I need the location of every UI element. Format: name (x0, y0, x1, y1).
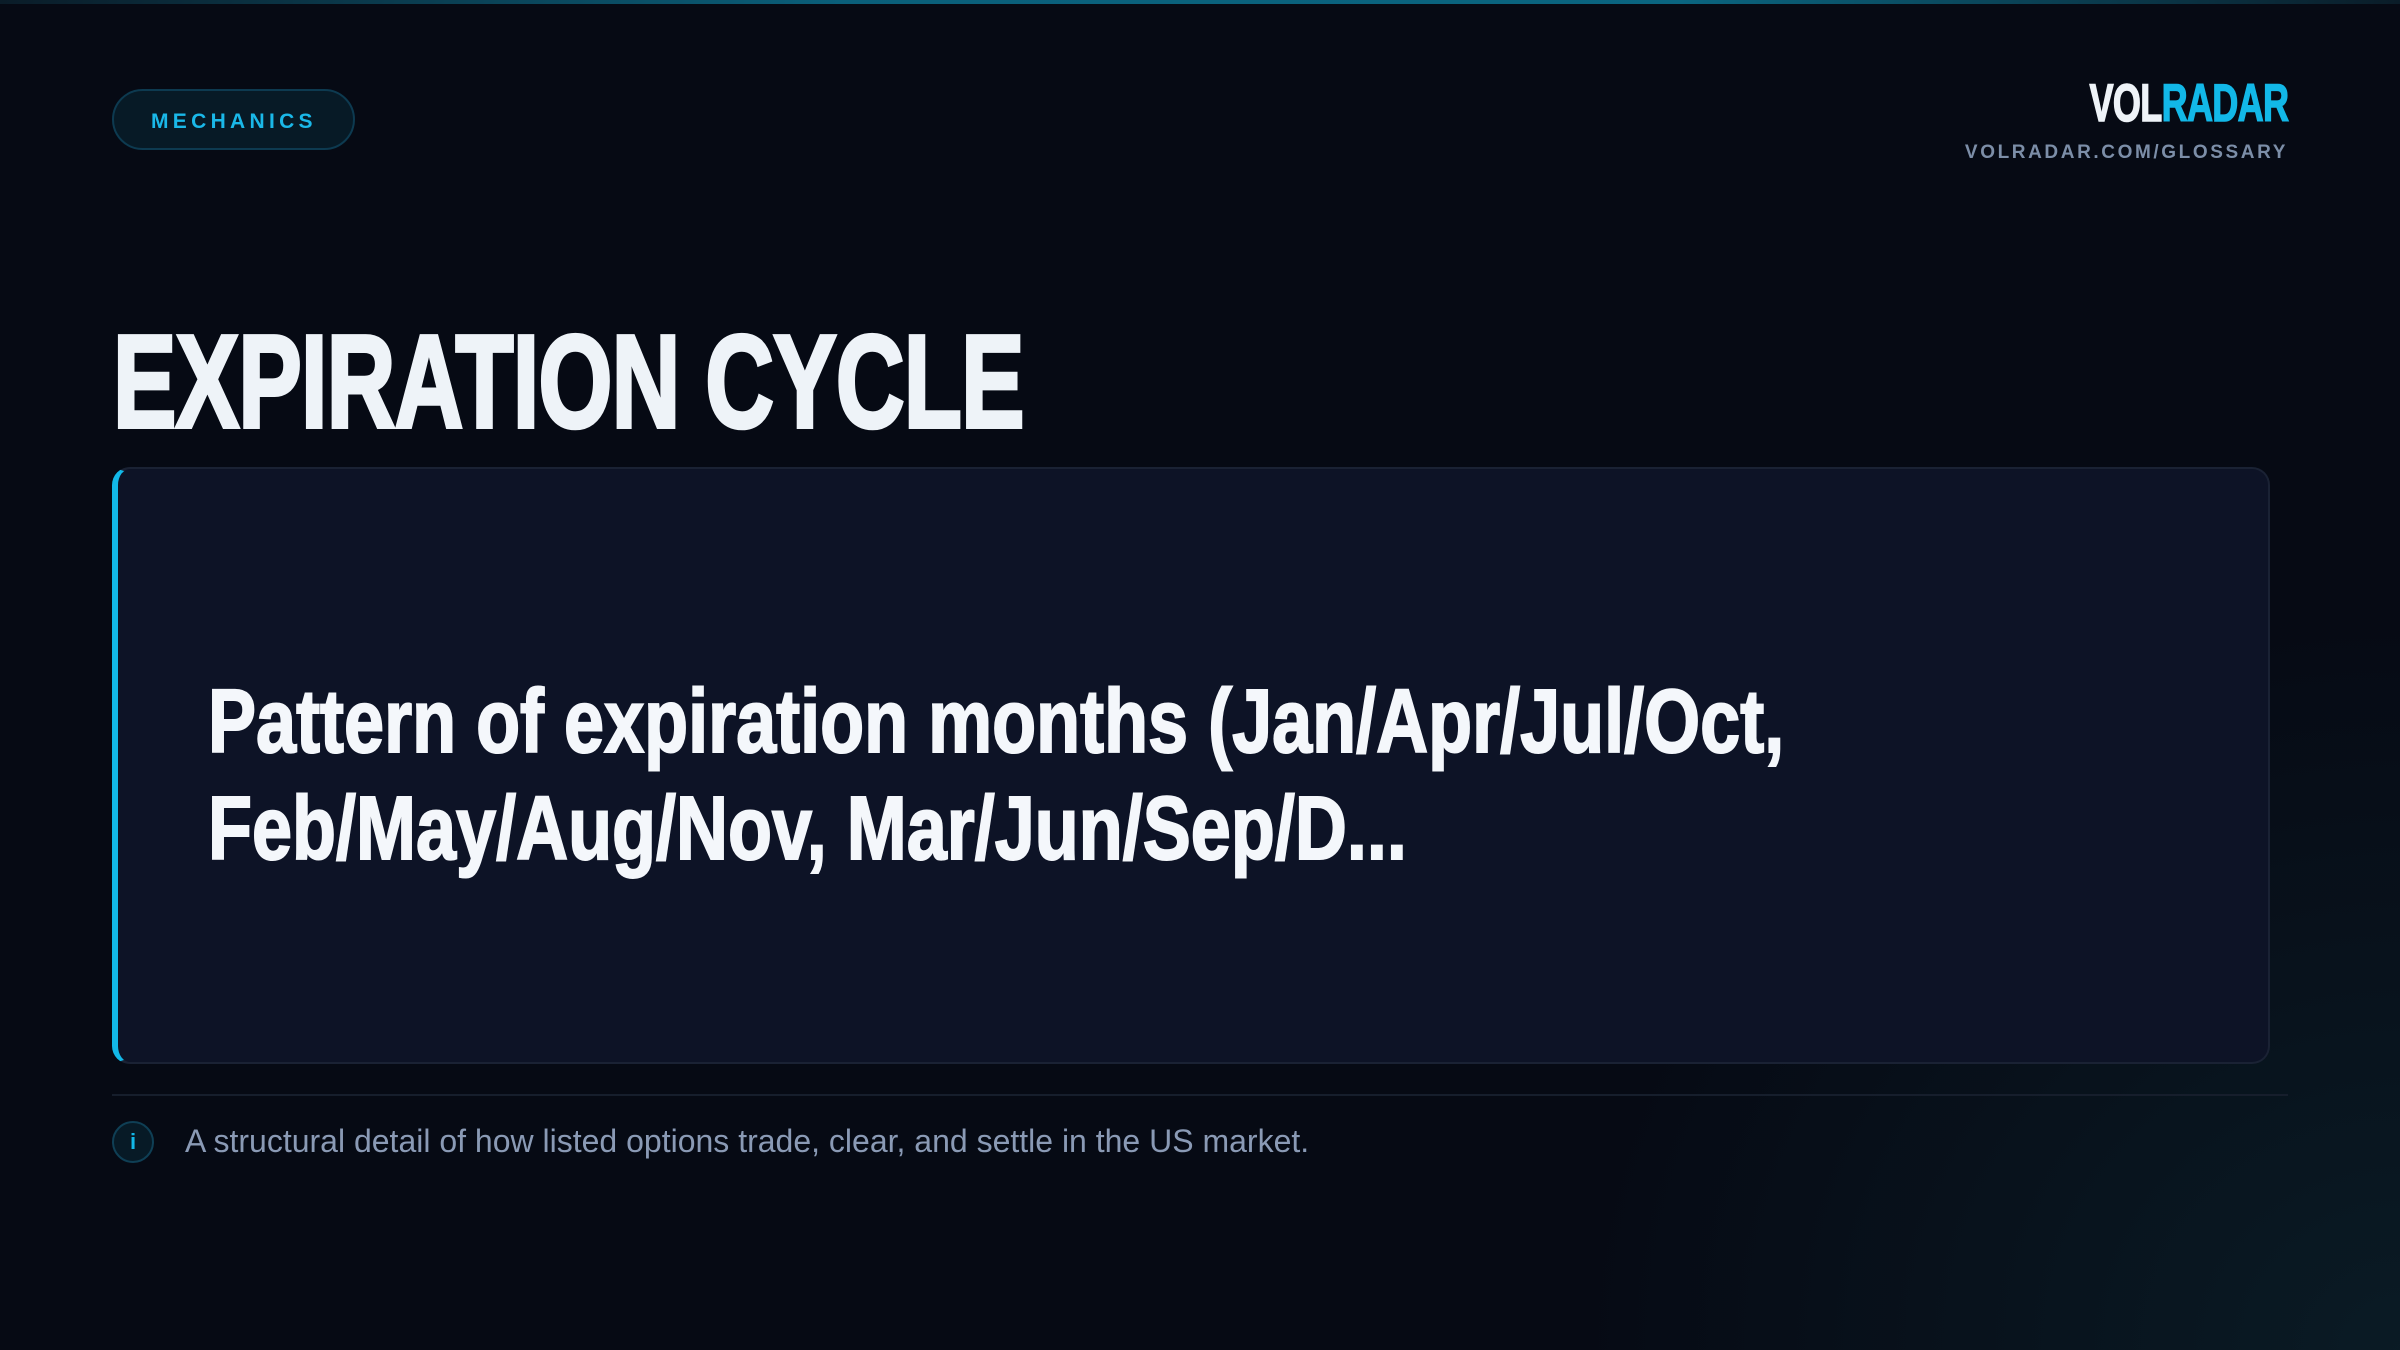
badge: mechanics: MECHANICS (151, 110, 317, 133)
logo wordmark: VOLRADAR (2089, 74, 2288, 133)
definition text: Pattern of expiration months (Jan/Apr/Jul/Oct, (208, 672, 1784, 772)
panel: definition (112, 467, 2270, 1064)
title: EXPIRATION CYCLE (113, 308, 1024, 455)
definition text (208, 672, 1784, 879)
icon: info: i (130, 1129, 136, 1154)
logo (1965, 74, 2290, 163)
footer text: A structural detail of how listed options trade, clear, and settle in the US market. (185, 1123, 1309, 1159)
badge: mechanics (112, 89, 355, 150)
definition text: Feb/May/Aug/Nov, Mar/Jun/Sep/D... (208, 779, 1407, 879)
footer note (112, 1121, 1309, 1163)
icon: info (112, 1121, 154, 1163)
logo url: VOLRADAR.COM/GLOSSARY (1965, 142, 2288, 163)
